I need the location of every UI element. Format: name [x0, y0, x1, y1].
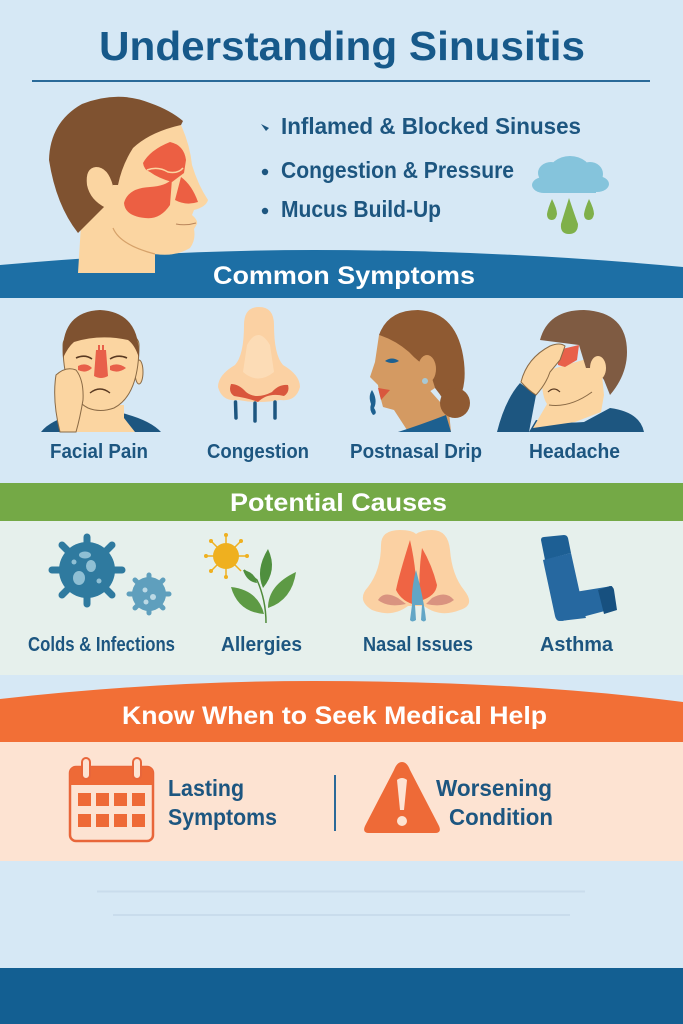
panel: seek medical help: [0, 681, 683, 861]
icon: headache man: [497, 310, 644, 432]
bullet list: Congestion & Pressure: [281, 157, 514, 183]
icon: cloud with green drops: [532, 156, 609, 234]
sinus: maxillary: [124, 179, 172, 218]
icon: nasal cross-section: [363, 530, 469, 622]
bullet marker: [262, 208, 268, 214]
label: Congestion: [207, 441, 309, 463]
footer band: [0, 968, 683, 1024]
icon: facial pain: [41, 310, 161, 432]
eye: [385, 358, 399, 363]
icon: congestion nose: [218, 307, 300, 421]
label: Allergies: [221, 634, 302, 656]
text: worsening condition: Condition: [449, 804, 553, 830]
text: lasting symptoms: [168, 775, 277, 830]
title: Understanding Sinusitis: [99, 23, 585, 69]
bullet marker: [262, 169, 268, 175]
bullet list: Inflamed & Blocked Sinuses: [281, 113, 581, 139]
drip: [370, 390, 376, 415]
icon: inhaler: [541, 535, 617, 621]
icon: warning triangle: [364, 762, 440, 833]
icon: calendar: [70, 758, 153, 841]
earring: [422, 378, 428, 384]
label: Nasal Issues: [363, 634, 473, 656]
bullet list: [261, 113, 581, 222]
bullet list: Mucus Build-Up: [281, 196, 441, 222]
icon: viruses: [52, 537, 169, 613]
lips: [378, 388, 390, 400]
text: worsening condition: Worsening: [436, 775, 552, 801]
label: Facial Pain: [50, 441, 148, 463]
label: Colds & Infections: [28, 634, 175, 656]
label: Headache: [529, 441, 620, 463]
bullet marker: [261, 124, 269, 131]
heading: seek medical help: Know When to Seek Medical Help: [122, 702, 547, 730]
heading: potential causes: Potential Causes: [230, 489, 447, 517]
sinus: nasal: [175, 177, 198, 204]
text: worsening condition: [436, 775, 553, 830]
text: lasting symptoms: Lasting: [168, 775, 244, 801]
panel: causes: [0, 483, 683, 675]
hand: [521, 344, 565, 395]
band: common symptoms: [0, 250, 683, 298]
heading: common symptoms: Common Symptoms: [213, 262, 475, 290]
panel: symptoms: [41, 307, 644, 463]
text: lasting symptoms: Symptoms: [168, 804, 277, 830]
ear: [87, 167, 113, 208]
icon: pollen and plant: [204, 533, 296, 623]
pain mark: [558, 345, 579, 367]
illustration: head with sinuses: [49, 97, 208, 273]
icon: postnasal drip woman: [370, 310, 470, 432]
label: Postnasal Drip: [350, 441, 482, 463]
label: Asthma: [540, 634, 614, 656]
sinus: frontal: [143, 142, 186, 182]
